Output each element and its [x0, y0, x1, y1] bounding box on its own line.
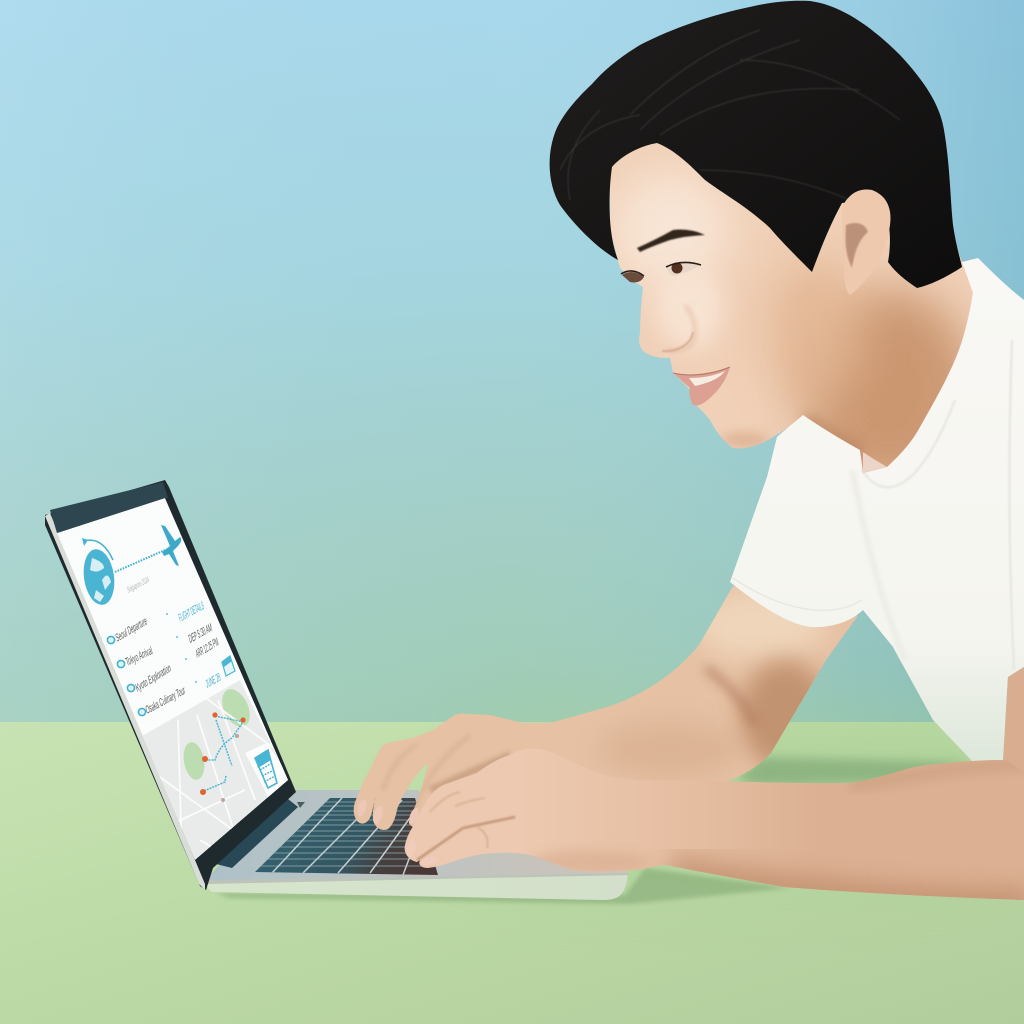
background wall — [0, 0, 1024, 724]
upper arm and back hand — [354, 586, 857, 830]
hinge — [212, 795, 298, 868]
keyboard — [250, 798, 440, 875]
laptop lid — [45, 480, 296, 890]
map pins — [200, 712, 246, 795]
back hand fingernails — [356, 799, 421, 825]
row 1: Seoul Departure — [114, 614, 148, 645]
front forearm and hand — [405, 749, 1024, 905]
itinerary list — [107, 613, 197, 717]
flight details column: JUNE 28 — [204, 670, 222, 691]
laptop screen — [57, 498, 300, 860]
flight graphic: dotted route — [115, 550, 165, 572]
map parks — [184, 689, 250, 780]
flight graphic: plane — [161, 525, 181, 566]
table surface — [0, 722, 1024, 1024]
flight graphic: globe — [84, 549, 114, 605]
shirt — [730, 258, 1024, 762]
small caption: Singapore 2024 — [126, 575, 150, 596]
near eye — [666, 262, 701, 276]
flight details column: ARR 12:25 PM — [194, 634, 220, 661]
calendar small icon — [222, 656, 235, 676]
face and neck — [610, 143, 973, 473]
flight details column: DEP 5:30 AM — [187, 620, 213, 646]
flight details column — [178, 601, 220, 688]
row 4: Osaka Culinary Tour — [144, 683, 187, 717]
far eye — [621, 271, 644, 282]
nose shadow — [662, 332, 693, 351]
hair — [550, 1, 962, 288]
laptop base — [205, 790, 628, 900]
mouth — [673, 367, 730, 406]
flight details column: FLIGHT DETAILS — [177, 598, 205, 625]
calendar card — [245, 744, 288, 797]
flight graphic: arc arrow — [82, 538, 113, 560]
gap behind thumb — [446, 826, 475, 846]
route lines — [204, 716, 243, 791]
far arm at right edge — [1003, 667, 1024, 795]
ear — [842, 190, 890, 295]
head — [550, 1, 975, 490]
row 3: Kyoto Exploration — [134, 661, 172, 694]
eyebrow — [637, 230, 705, 252]
front hand fingernails — [405, 838, 438, 868]
screen: map — [140, 680, 300, 860]
laptop — [45, 480, 628, 900]
row 2: Tokyo Arrival — [124, 644, 154, 668]
